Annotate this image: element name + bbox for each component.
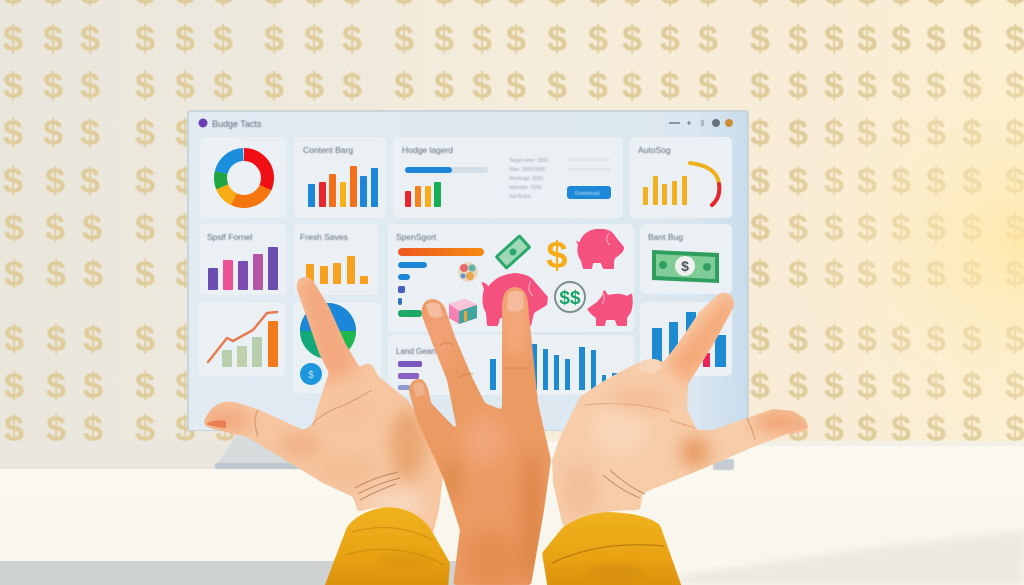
panel: spending icons bbox=[388, 224, 634, 332]
panel: message legend: Set Rules bbox=[509, 194, 531, 200]
dollar sign wallpaper: $$$$$$$$$$$$$ bbox=[3, 160, 1024, 201]
wall background bbox=[0, 0, 1024, 445]
dollar sign wallpaper: $$$$$$$$$$$$$$$$$$$$$$$$$$ bbox=[3, 18, 1024, 59]
panel: pie chart bbox=[293, 302, 381, 393]
icon: dollar coin: $$ bbox=[559, 288, 581, 309]
panel: fresh saves bars bbox=[294, 224, 378, 295]
panel: gauge and bars bbox=[630, 137, 732, 218]
panel: spend funnel bars: Spslf Fornel bbox=[207, 232, 252, 242]
icon: gift cube bbox=[449, 299, 477, 324]
dollar sign wallpaper: $$$$$$$$$$$$$ bbox=[4, 318, 1024, 359]
dollar sign wallpaper: $$$$$$$$$$$$$$$$$$$$$$$$$$ bbox=[3, 65, 1024, 106]
sunlight glow bbox=[500, 0, 1024, 445]
panel: cash bill bbox=[640, 224, 732, 294]
panel: message legend: Target area: 3000 bbox=[509, 158, 548, 164]
table surface bbox=[0, 441, 1024, 585]
panel: fresh saves bars: Fresh Saves bbox=[300, 232, 348, 242]
panel: gauge and bars: AutoSog bbox=[638, 145, 671, 155]
icon: dollar sign: $ bbox=[546, 235, 568, 277]
icon: dollar coin bbox=[555, 282, 585, 312]
panel: pie chart: $ bbox=[308, 370, 314, 381]
panel: message legend: Download bbox=[575, 191, 599, 197]
dollar sign wallpaper: $$$$$$$$$$$$$ bbox=[3, 112, 1024, 153]
panel: land gain bars: Land Gean bbox=[396, 347, 436, 356]
panel: message legend: Hodge lagerd bbox=[402, 145, 453, 155]
panel: content bar chart bbox=[294, 137, 386, 218]
dollar sign wallpaper: $$$$$$$$$$$$$ bbox=[4, 253, 1024, 294]
panel: spending icons: SpenSgort bbox=[396, 232, 437, 242]
panel: cash bill: $ bbox=[681, 258, 689, 274]
dollar sign wallpaper: $$$$$$$$$$$$$ bbox=[4, 207, 1024, 248]
left sleeve bbox=[323, 507, 450, 585]
icon: piggy bank top bbox=[574, 229, 624, 269]
panel: donut chart bbox=[200, 137, 286, 218]
right hand bbox=[545, 285, 815, 530]
panel: message legend: Plan: 3000/3000 bbox=[509, 167, 546, 173]
left hand bbox=[204, 276, 443, 533]
center hand bbox=[405, 282, 555, 585]
right sleeve bbox=[542, 512, 683, 585]
dollar sign wallpaper bbox=[3, 0, 1024, 449]
icon: piggy bank large bbox=[481, 273, 548, 326]
dashboard header bbox=[198, 118, 733, 129]
icon: piggy bank small bbox=[587, 289, 633, 326]
monitor screen bbox=[187, 110, 749, 431]
panel: land gain bars bbox=[388, 335, 634, 395]
panel: cash bill: Bant Bug bbox=[648, 232, 683, 242]
monitor stand bbox=[215, 430, 734, 470]
panel: message legend: Maintain: 3000 bbox=[509, 185, 542, 191]
panel: message legend: Markings: 3000 bbox=[509, 176, 543, 182]
dashboard header: Budge Tacts bbox=[212, 119, 262, 129]
panel: trend line bbox=[199, 302, 285, 376]
panel: message legend bbox=[393, 137, 623, 218]
panel: content bar chart: Content Barg bbox=[303, 145, 353, 155]
panel: spend funnel bars bbox=[200, 224, 286, 295]
panel: blue bars bbox=[640, 302, 732, 376]
icon: colourful ball bbox=[458, 262, 478, 282]
icon: banknote bbox=[494, 234, 532, 270]
dollar sign wallpaper: $$$$$$$$$$$$$ bbox=[4, 365, 1024, 406]
dollar sign wallpaper: $$$$$$$$$$$$$$ bbox=[4, 408, 1024, 449]
